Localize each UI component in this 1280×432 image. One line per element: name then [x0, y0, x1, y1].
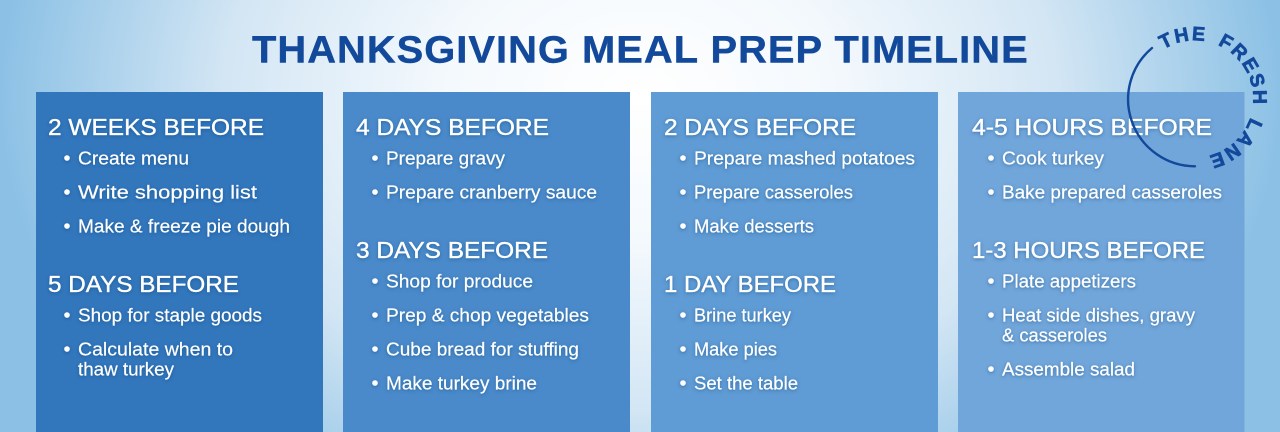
- panel background 3: [651, 92, 938, 432]
- section: 5 days before: Shop for staple goods: [78, 306, 262, 326]
- section: 4-5 hours before: Cook turkey: [1002, 148, 1104, 168]
- section: 2 weeks before: 2 WEEKS BEFORE: [48, 114, 264, 140]
- section: 2 days before: Prepare mashed potatoes: [694, 148, 915, 168]
- panel background 1: [36, 92, 323, 432]
- panel: 2 weeks and 5 days before: [36, 92, 323, 432]
- panel background 2: [343, 92, 630, 432]
- section: 5 days before: [48, 271, 262, 380]
- section: 2 weeks before: Create menu: [78, 148, 189, 168]
- logo ring arc: [1128, 48, 1195, 166]
- section: 2 days before: 2 DAYS BEFORE: [664, 114, 856, 140]
- section: 1-3 hours before: [972, 237, 1205, 380]
- section: 1 day before: Make pies: [694, 340, 777, 360]
- section: 2 days before: Prepare casseroles: [694, 182, 853, 202]
- section: 1-3 hours before: & casseroles: [1002, 326, 1107, 346]
- section: 4 days before: [356, 114, 597, 202]
- section: 3 days before: 3 DAYS BEFORE: [356, 237, 548, 263]
- section: 4-5 hours before: Bake prepared casseroles: [1002, 182, 1222, 202]
- section: 4 days before: 4 DAYS BEFORE: [356, 114, 549, 140]
- section: 5 days before: Calculate when to: [78, 340, 233, 360]
- section: 4-5 hours before: 4-5 HOURS BEFORE: [972, 114, 1212, 140]
- logo circular text: THE FRESH LANE: [1157, 26, 1268, 168]
- logo: The Fresh Lane circular badge: [1126, 26, 1268, 168]
- section: 2 days before: Make desserts: [694, 216, 814, 236]
- section: 5 days before: thaw turkey: [78, 360, 174, 380]
- section: 3 days before: Shop for produce: [386, 272, 533, 292]
- panel background 4: [958, 92, 1244, 432]
- section: 4 days before: Prepare cranberry sauce: [386, 182, 597, 202]
- section: 2 days before: [664, 114, 915, 236]
- panel: 4 days and 3 days before: [343, 92, 630, 432]
- section: 1 day before: Brine turkey: [694, 306, 791, 326]
- section: 1-3 hours before: 1-3 HOURS BEFORE: [972, 237, 1205, 263]
- section: 4-5 hours before: [972, 114, 1222, 202]
- title: THANKSGIVING MEAL PREP TIMELINE: [252, 29, 1029, 71]
- section: 1 day before: [664, 271, 836, 394]
- section: 1-3 hours before: Plate appetizers: [1002, 272, 1136, 292]
- section: 3 days before: [356, 237, 589, 394]
- section: 1-3 hours before: Assemble salad: [1002, 360, 1135, 380]
- section: 3 days before: Cube bread for stuffing: [386, 340, 579, 360]
- section: 3 days before: Make turkey brine: [386, 374, 537, 394]
- section: 3 days before: Prep & chop vegetables: [386, 306, 589, 326]
- section: 4 days before: Prepare gravy: [386, 148, 505, 168]
- section: 1 day before: 1 DAY BEFORE: [664, 271, 836, 297]
- section: 1 day before: Set the table: [694, 374, 798, 394]
- section: 2 weeks before: Write shopping list: [78, 182, 257, 202]
- section: 2 weeks before: Make & freeze pie dough: [78, 216, 290, 236]
- panel: 2 days and 1 day before: [651, 92, 938, 432]
- section: 5 days before: 5 DAYS BEFORE: [48, 271, 239, 297]
- section: 2 weeks before: [48, 114, 290, 236]
- section: 1-3 hours before: Heat side dishes, gravy: [1002, 306, 1195, 326]
- panel: 4-5 hours and 1-3 hours before: [958, 92, 1244, 432]
